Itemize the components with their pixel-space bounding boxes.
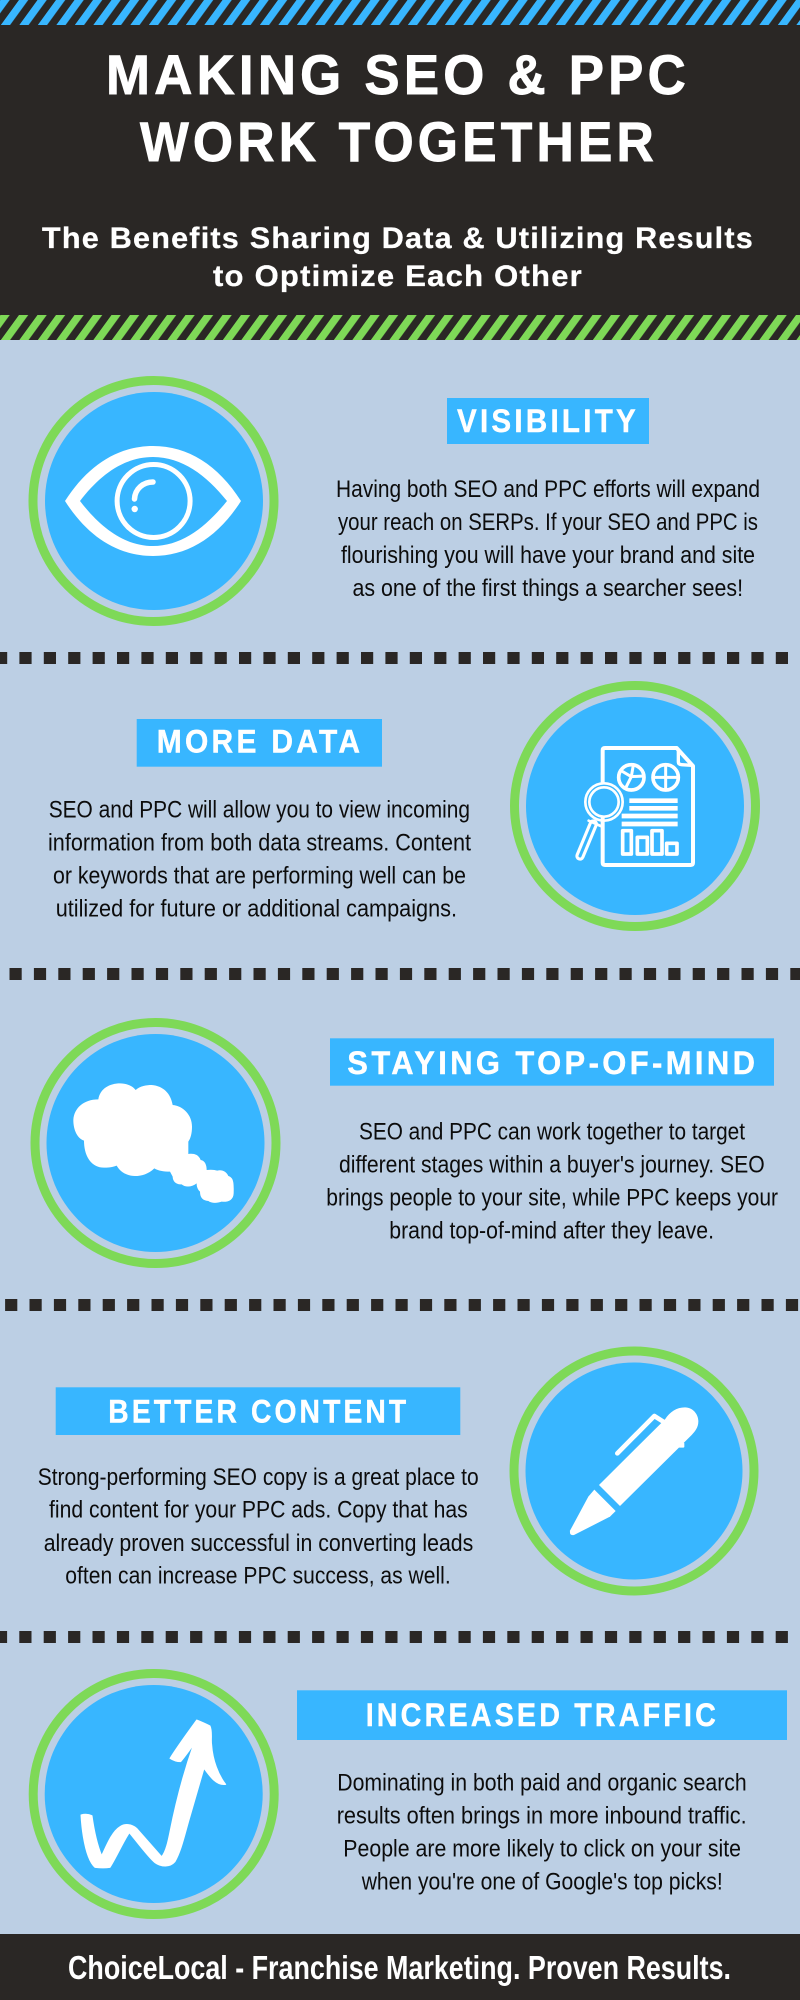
text block: increased traffic: [337, 1770, 747, 1895]
subtitle: to Optimize Each Other: [213, 260, 583, 293]
text block: more data: utilized for future or additional campaigns.: [56, 896, 457, 923]
title: MAKING SEO & PPC: [106, 43, 690, 106]
text block: better content: Strong-performing SEO copy is a great place to: [38, 1464, 479, 1491]
subtitle: The Benefits Sharing Data & Utilizing Results: [42, 222, 754, 255]
text block: increased traffic: results often brings in more inbound traffic.: [337, 1802, 747, 1829]
text block: better content: [38, 1464, 479, 1590]
heading: better content: [56, 1387, 460, 1435]
icon: eye: [33, 380, 274, 622]
title: WORK TOGETHER: [140, 110, 658, 173]
panel: better content: [38, 1351, 754, 1591]
blue striped band: [0, 0, 800, 25]
text block: more data: or keywords that are performing well can be: [53, 863, 466, 890]
text block: better content: find content for your PPC ads. Copy that has: [49, 1497, 468, 1524]
text block: staying top-of-mind: [326, 1118, 778, 1245]
text block: increased traffic: People are more likely to click on your site: [343, 1836, 741, 1863]
text block: increased traffic: when you're one of Google's top picks!: [361, 1868, 723, 1895]
text block: visibility: [336, 476, 760, 602]
heading: visibility: VISIBILITY: [457, 403, 639, 439]
heading: increased traffic: [297, 1690, 787, 1740]
subtitle: [42, 222, 754, 293]
panel: staying top-of-mind: [35, 1022, 778, 1264]
icon: rising arrow: [33, 1674, 274, 1914]
icon: report with magnifier: [514, 686, 756, 926]
text block: better content: often can increase PPC success, as well.: [65, 1563, 451, 1590]
panel: visibility: [33, 380, 760, 622]
text block: more data: information from both data streams. Content: [48, 830, 471, 857]
icon: pen: [514, 1351, 754, 1591]
heading: better content: BETTER CONTENT: [108, 1394, 409, 1430]
heading: more data: MORE DATA: [157, 724, 363, 760]
panel: increased traffic: [33, 1674, 787, 1914]
title: [106, 43, 690, 173]
text block: better content: already proven successful in converting leads: [44, 1530, 473, 1557]
heading: staying top-of-mind: STAYING TOP-OF-MIND: [347, 1045, 758, 1081]
text block: staying top-of-mind: brand top-of-mind after they leave.: [389, 1218, 714, 1245]
heading: increased traffic: INCREASED TRAFFIC: [366, 1697, 719, 1733]
text block: visibility: flourishing you will have your brand and site: [341, 542, 755, 569]
footer: [0, 1934, 800, 2000]
text block: visibility: as one of the first things a searcher sees!: [352, 575, 743, 602]
green striped band: [0, 315, 800, 340]
header panel: [0, 0, 800, 340]
text block: more data: SEO and PPC will allow you to view incoming: [49, 796, 470, 824]
panel: more data: [48, 686, 756, 926]
text block: increased traffic: Dominating in both paid and organic search: [337, 1770, 747, 1797]
text block: staying top-of-mind: SEO and PPC can work together to target: [359, 1118, 745, 1145]
text block: more data: [48, 796, 471, 923]
heading: more data: [137, 719, 382, 767]
icon: thought cloud: [35, 1022, 276, 1264]
